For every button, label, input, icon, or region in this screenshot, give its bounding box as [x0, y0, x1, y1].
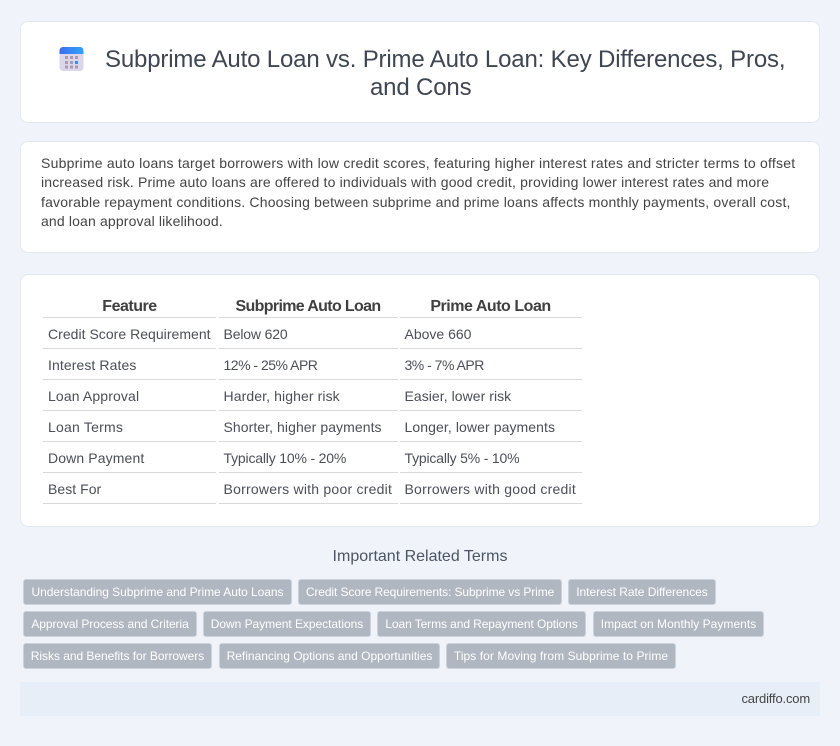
- row: credit score: Above 660: [404, 326, 471, 342]
- tag: Risks and Benefits for Borrowers: [31, 649, 204, 663]
- row: credit score: Below 620: [224, 326, 288, 342]
- panel: comparison table: [20, 274, 820, 527]
- text block: summary paragraph: increased risk. Prime auto loans are offered to individuals with good credit, providing lower interest rates and more: [41, 174, 769, 190]
- tag: Impact on Monthly Payments: [601, 617, 756, 631]
- title: and Cons: [370, 74, 471, 101]
- row: best for: Borrowers with poor credit: [224, 481, 392, 497]
- table header: [43, 298, 582, 318]
- text block: summary paragraph: [41, 155, 796, 229]
- table header: Prime Auto Loan: [430, 298, 551, 315]
- tag: [219, 643, 440, 669]
- row: best for: [43, 481, 582, 504]
- tag: Refinancing Options and Opportunities: [227, 649, 432, 663]
- tag: [568, 579, 716, 605]
- icon: calendar: [60, 47, 84, 71]
- row: loan approval: Easier, lower risk: [404, 388, 511, 404]
- row: best for: Borrowers with good credit: [404, 481, 576, 497]
- tag: [298, 579, 562, 605]
- tag: Interest Rate Differences: [576, 585, 708, 599]
- row: down payment: Down Payment: [48, 450, 144, 466]
- heading: related terms: Important Related Terms: [333, 548, 507, 565]
- row: loan terms: Longer, lower payments: [404, 419, 555, 435]
- tag: [23, 643, 212, 669]
- tag: Credit Score Requirements: Subprime vs Prime: [306, 585, 554, 599]
- text block: summary paragraph: Subprime auto loans target borrowers with low credit scores, featuring higher interest rates and stricter terms to offset: [41, 155, 795, 171]
- title: Subprime Auto Loan vs. Prime Auto Loan: Key Differences, Pros,: [105, 46, 785, 73]
- tag: Loan Terms and Repayment Options: [385, 617, 578, 631]
- tag: Approval Process and Criteria: [31, 617, 189, 631]
- text block: summary paragraph: favorable repayment conditions. Choosing between subprime and prime loans affects monthly payments, overall cost,: [41, 194, 791, 210]
- table: [43, 298, 582, 504]
- tag: [23, 611, 197, 637]
- title: [105, 46, 785, 101]
- tag: [377, 611, 586, 637]
- row: interest rates: 3% - 7% APR: [404, 357, 484, 373]
- footer: [20, 682, 820, 716]
- tag: Understanding Subprime and Prime Auto Loans: [31, 585, 284, 599]
- row: credit score: Credit Score Requirement: [48, 326, 211, 342]
- panel: header: [20, 21, 820, 123]
- row: loan approval: [43, 388, 582, 411]
- row: best for: Best For: [48, 481, 101, 497]
- tag: [23, 579, 292, 605]
- tag group: related terms: [23, 579, 764, 669]
- text block: summary paragraph: and loan approval likelihood.: [41, 213, 223, 229]
- row: down payment: Typically 10% - 20%: [224, 450, 346, 466]
- table header: Feature: [102, 298, 157, 315]
- table header: Subprime Auto Loan: [235, 298, 381, 315]
- row: loan terms: Loan Terms: [48, 419, 123, 435]
- row: interest rates: [43, 357, 582, 380]
- row: down payment: [43, 450, 582, 473]
- row: down payment: Typically 5% - 10%: [404, 450, 519, 466]
- footer: site name: cardiffo.com: [741, 691, 810, 706]
- tag: Tips for Moving from Subprime to Prime: [454, 649, 668, 663]
- tag: [593, 611, 764, 637]
- tag: [203, 611, 371, 637]
- row: loan terms: [43, 419, 582, 442]
- row: loan terms: Shorter, higher payments: [224, 419, 382, 435]
- tag: Down Payment Expectations: [211, 617, 363, 631]
- panel: summary: [20, 141, 820, 253]
- row: loan approval: Harder, higher risk: [224, 388, 340, 404]
- row: loan approval: Loan Approval: [48, 388, 139, 404]
- row: interest rates: Interest Rates: [48, 357, 136, 373]
- row: interest rates: 12% - 25% APR: [224, 357, 317, 373]
- row: credit score: [43, 326, 582, 349]
- tag: [446, 643, 676, 669]
